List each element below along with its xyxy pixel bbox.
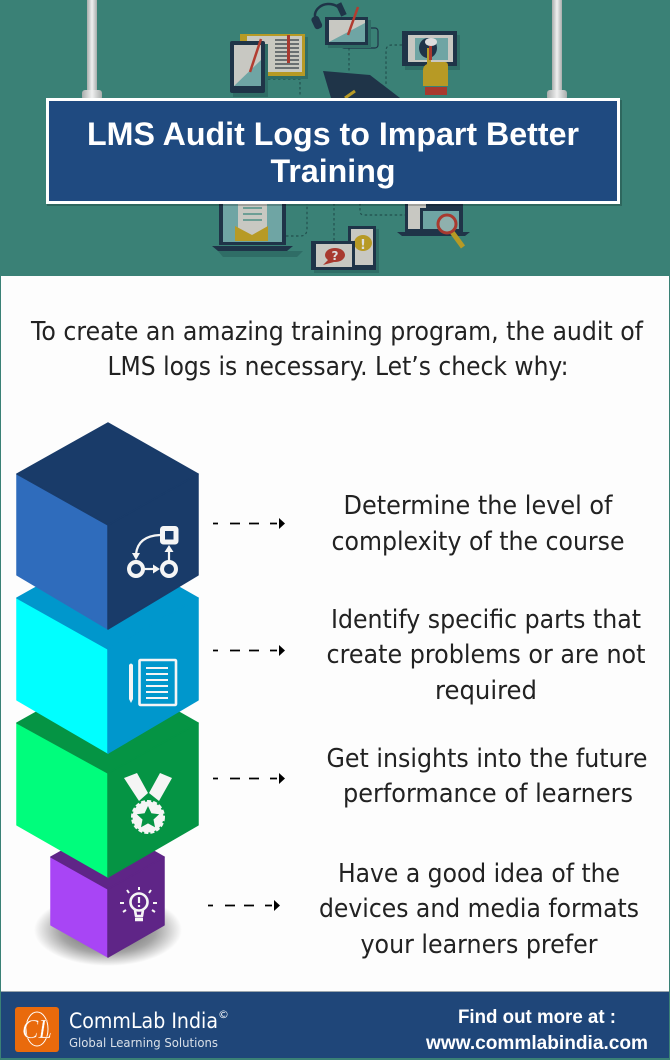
title banner [46,98,622,206]
main content panel [1,276,669,992]
icon: light bulb [120,887,157,920]
cube stack [17,423,198,966]
header illustration: education devices [212,2,470,273]
arrow 1 [213,518,285,529]
item 4 text: devices and media formats [319,894,639,924]
arrow 2 [213,645,285,656]
cube 2: cyan with document [17,547,198,753]
icon: open book and tablet [230,34,308,97]
item 1 text: Determine the level of [344,491,613,521]
item 4 text: Have a good idea of the [338,859,620,889]
floor shadow [34,894,182,966]
icon: laptop with magnifier [397,203,470,247]
item 4 text: your learners prefer [360,930,598,960]
title [87,116,579,189]
intro text [30,317,644,382]
icon: document and pencil [129,660,176,705]
item 1 text: complexity of the course [332,527,624,557]
header background [0,0,670,276]
footer call to action [425,1007,648,1054]
cube 3: green with medal [17,672,198,877]
title: Training [270,153,396,189]
cube 4: purple with light bulb [51,825,164,957]
logo: CommLab India: CL [22,1014,52,1044]
title: LMS Audit Logs to Impart Better [87,116,579,152]
logo: CommLab India: © [218,1008,229,1021]
logo: CommLab India [15,1007,229,1052]
icon: tablet with headphones [310,2,378,48]
hanging poles [82,0,567,100]
arrow 3 [213,773,285,784]
footer bar [1,991,669,1058]
icon: medal [124,773,172,832]
icon: graduation cap [323,71,400,98]
item 2 text: required [435,676,537,706]
item 1 text [332,491,624,557]
item 2 text: create problems or are not [326,640,646,670]
dotted connectors [268,45,406,245]
icon: tablet with head and hand [402,31,460,95]
intro text: LMS logs is necessary. Let’s check why: [108,352,568,382]
icon: tablets with speech bubbles [311,226,379,273]
item 3 text [326,744,648,809]
item 4 text [319,859,639,960]
item 3 text: Get insights into the future [326,744,648,774]
item 2 text: Identify specific parts that [331,605,641,635]
footer call to action: Find out more at : [458,1007,616,1028]
footer call to action: www.commlabindia.com [425,1033,648,1054]
logo: CommLab India: CommLab India [69,1009,218,1033]
icon: tablets with speech bubbles: ? [332,249,339,263]
icon: workflow diagram [129,528,176,576]
icon: tablets with speech bubbles: ! [360,238,366,253]
arrow 4 [208,900,280,911]
item 2 text [326,605,646,706]
cube 1: navy with workflow [17,423,198,629]
item 3 text: performance of learners [343,779,633,809]
logo: CommLab India: Global Learning Solutions [69,1035,218,1050]
icon: laptop with envelope [212,203,303,257]
